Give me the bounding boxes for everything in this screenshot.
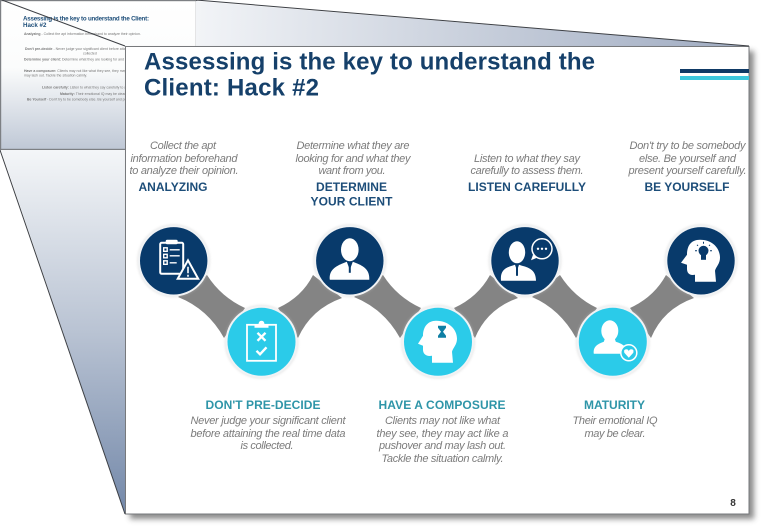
- gray connectors: [178, 275, 694, 338]
- bottom text: don't pre-decide: [190, 398, 346, 452]
- icon: clipboard with x and check: [247, 321, 276, 361]
- top text: listen carefully: LISTEN CAREFULLY: [468, 180, 586, 194]
- top text: determine your client: want from you.: [318, 165, 386, 177]
- small slide bullet text: may lash out. Tackle the situation calmly.: [24, 74, 87, 78]
- step 6 circle: maturity: [576, 305, 650, 379]
- icon: business person: [330, 238, 369, 280]
- top text: determine your client: [296, 140, 412, 208]
- top text: determine your client: DETERMINE: [316, 180, 387, 194]
- top text: analyzing: Collect the apt: [150, 140, 217, 152]
- decorative title bars: [680, 69, 749, 80]
- panel: main slide shadow: [130, 51, 754, 519]
- bottom text: don't pre-decide: Never judge your significant client: [190, 415, 346, 427]
- top text: be yourself: [628, 140, 747, 194]
- small slide bullet text: Analyzing - Collect the apt information beforehand to analyze their opinion.: [24, 32, 141, 36]
- top text: be yourself: present yourself carefully.: [628, 165, 746, 177]
- step 4 circle: have a composure: [401, 305, 475, 379]
- top text: analyzing: [130, 140, 238, 194]
- zoom funnel: left band: [1, 150, 125, 514]
- title: Client: Hack #2: [144, 74, 319, 102]
- small slide bullet text: collected: [83, 52, 97, 56]
- top text: listen carefully: Listen to what they say: [474, 153, 582, 165]
- step 2 circle: don't pre-decide: [224, 305, 298, 379]
- bottom text: maturity: may be clear.: [584, 428, 646, 440]
- bottom text: don't pre-decide: is collected.: [240, 440, 294, 452]
- icon: person with heart badge: [594, 320, 637, 361]
- page number: 8: [730, 498, 736, 509]
- top text: determine your client: YOUR CLIENT: [310, 194, 393, 208]
- top text: be yourself: BE YOURSELF: [644, 180, 730, 194]
- top text: determine your client: Determine what they are: [296, 140, 410, 152]
- top text: listen carefully: carefully to assess them.: [470, 165, 584, 177]
- top text: listen carefully: [468, 153, 586, 194]
- icon: clipboard with warning triangle: [160, 240, 198, 279]
- bottom text: maturity: [572, 398, 658, 440]
- top text: analyzing: ANALYZING: [138, 180, 208, 194]
- small slide title: Assessing is the key to understand the Client:: [23, 16, 149, 22]
- step 3 circle: determine your client: [313, 224, 386, 297]
- panel: small source slide: [0, 0, 196, 150]
- small slide bullet text: Don't pre-decide - Never judge your significant client before attaining the real time data is: [25, 47, 165, 51]
- icon: person with speech bubble: [501, 239, 552, 281]
- small slide bullet text: Have a composure: Clients may not like what they see, they may act like a pushover and: [24, 69, 163, 73]
- bottom text: have a composure: Tackle the situation calmly.: [382, 453, 504, 465]
- top text: analyzing: to analyze their opinion.: [130, 165, 238, 177]
- panel: main slide: [126, 46, 749, 514]
- small slide bullet text: Determine your client: Determine what they are looking for and what they want from you.: [24, 58, 164, 62]
- icon: head with hourglass: [418, 321, 457, 363]
- top text: determine your client: looking for and what they: [296, 153, 412, 165]
- bottom text: have a composure: they see, they may act like a: [376, 428, 508, 440]
- bottom text: have a composure: pushover and may lash out.: [378, 440, 506, 452]
- icon: head with lightbulb: [681, 240, 720, 282]
- bottom text: have a composure: Clients may not like what: [385, 415, 501, 427]
- step 1 circle: analyzing: [137, 224, 210, 297]
- top text: be yourself: Don't try to be somebody: [630, 140, 747, 152]
- small slide bullet text: [24, 32, 165, 102]
- bottom text: don't pre-decide: before attaining the real time data: [190, 428, 346, 440]
- bottom text: maturity: Their emotional IQ: [572, 415, 658, 427]
- zoom funnel: top band: [125, 1, 749, 46]
- title: Assessing is the key to understand the: [144, 48, 595, 76]
- top text: analyzing: information beforehand: [130, 153, 238, 165]
- step 7 circle: be yourself: [664, 224, 738, 297]
- small slide bullet text: Be Yourself - Don't try to be somebody else. Be yourself and present yourself carefully.: [27, 98, 162, 102]
- step 5 circle: listen carefully: [488, 224, 562, 297]
- bottom text: maturity: MATURITY: [584, 398, 645, 412]
- small slide bullet text: Listen carefully: Listen to what they say carefully to assess them.: [42, 86, 145, 90]
- bottom text: don't pre-decide: DON'T PRE-DECIDE: [206, 398, 320, 412]
- small slide title: Hack #2: [23, 22, 47, 29]
- bottom text: have a composure: HAVE A COMPOSURE: [378, 398, 506, 412]
- small slide bullet text: Maturity: Their emotional IQ may be clear.: [60, 92, 126, 96]
- bottom text: have a composure: [376, 398, 508, 465]
- top text: be yourself: else. Be yourself and: [639, 153, 737, 165]
